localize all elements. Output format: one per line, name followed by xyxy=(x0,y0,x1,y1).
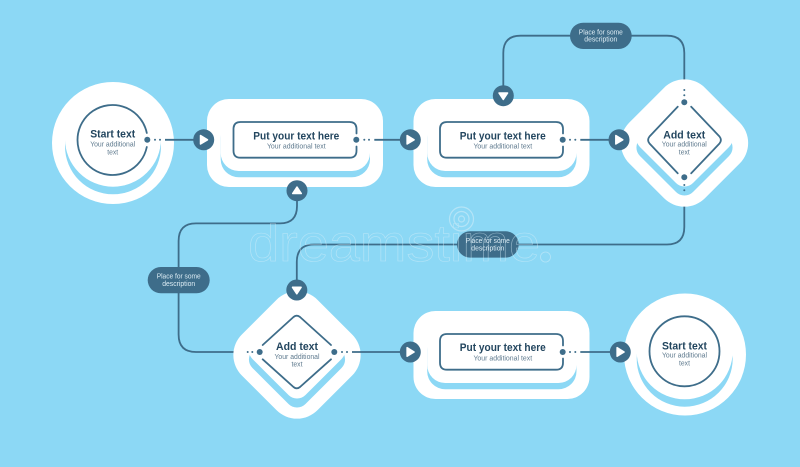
start label xyxy=(90,129,136,156)
end label: Start text xyxy=(662,340,707,352)
connector: right diamond to lower diamond xyxy=(297,195,684,290)
callout: middle description pill: Place for some xyxy=(466,238,510,245)
node: process box 3 xyxy=(414,311,590,399)
box 1 label: Put your text here xyxy=(253,130,339,142)
box 3 label xyxy=(460,342,546,362)
callout: top description pill xyxy=(570,23,632,49)
diamond label: Your additional xyxy=(274,354,320,361)
arrow button: into diamond xyxy=(608,129,630,150)
watermark: dreamstime xyxy=(248,215,540,273)
connector: box 2 to diamond xyxy=(560,137,610,143)
node: decision diamond right xyxy=(609,67,760,219)
box 2 label: Put your text here xyxy=(460,130,546,142)
node: start circle xyxy=(52,82,174,204)
ring xyxy=(650,316,720,386)
diamond label: Add text xyxy=(276,341,318,353)
diamond label: Your additional xyxy=(662,142,707,149)
connector: diamond bottom dots xyxy=(681,174,687,191)
callout: left description pill xyxy=(148,267,210,293)
inner frame xyxy=(440,122,563,158)
end label: Your additional xyxy=(662,353,707,360)
end label: text xyxy=(679,361,690,368)
connector: lower diamond left dots xyxy=(247,349,263,355)
arrow button: down into lower diamond xyxy=(286,280,307,300)
end label xyxy=(662,340,707,368)
arrow button: into box 3 xyxy=(400,342,421,362)
callout: middle description pill xyxy=(457,231,519,258)
diamond label: text xyxy=(292,362,303,369)
arrow button: into box 2 xyxy=(400,129,421,150)
box 2 label xyxy=(460,130,546,150)
start label: Your additional xyxy=(90,142,136,148)
callout: left description pill: description xyxy=(162,281,195,288)
box 2 label: Your additional text xyxy=(473,143,532,150)
callout: top description pill: description xyxy=(584,37,617,44)
connector: box 3 to end circle xyxy=(560,349,612,355)
connector: lower diamond to box 3 xyxy=(331,349,402,355)
arrow button: up into box 1 xyxy=(286,180,308,201)
arrow button: into box 1 xyxy=(193,129,214,150)
diamond label: Add text xyxy=(663,129,706,141)
callout: left description pill: Place for some xyxy=(157,274,201,281)
node: process box 2 xyxy=(414,99,590,187)
node: end circle xyxy=(624,294,746,416)
diamond label xyxy=(274,341,320,369)
inner frame xyxy=(440,334,563,370)
box 3 label: Put your text here xyxy=(460,342,546,354)
connector: top loop xyxy=(503,36,684,96)
ring xyxy=(78,105,147,175)
diamond label xyxy=(662,129,707,156)
connector: box 1 to box 2 xyxy=(353,137,402,143)
inner frame xyxy=(263,316,331,388)
box 1 label: Your additional text xyxy=(267,143,326,150)
callout: top description pill: Place for some xyxy=(579,29,623,36)
inner frame xyxy=(234,122,356,158)
inner frame xyxy=(648,107,721,173)
box 3 label: Your additional text xyxy=(473,355,532,362)
node: process box 1 xyxy=(207,99,383,187)
diamond label: text xyxy=(679,149,690,156)
connector: diamond top dots xyxy=(681,89,687,105)
connector: start to box 1 xyxy=(144,137,195,143)
arrow button: into end circle xyxy=(610,342,631,362)
start label: Start text xyxy=(90,129,136,141)
start label: text xyxy=(107,149,118,156)
node: decision diamond lower xyxy=(221,279,373,431)
arrow button: down into box 2 xyxy=(493,85,514,106)
callout: middle description pill: description xyxy=(471,245,504,252)
connector: lower diamond to first box xyxy=(179,190,297,352)
box 1 label xyxy=(253,130,339,150)
